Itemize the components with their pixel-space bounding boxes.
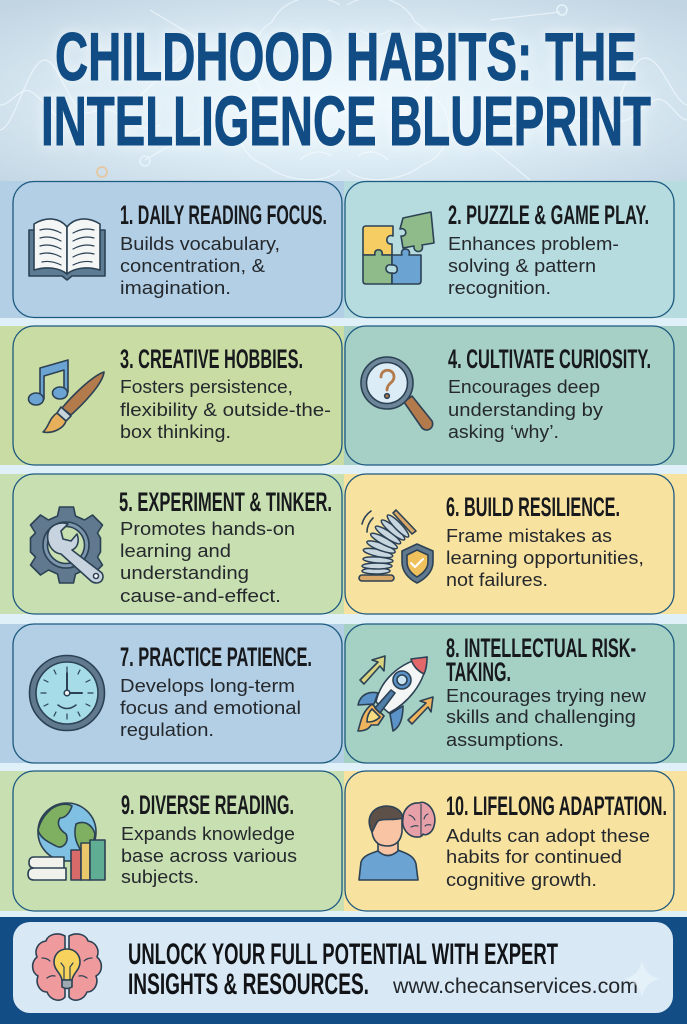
header background with brain and circuit lines (0, 0, 687, 181)
text: habit 3: Fosters persistence, (120, 377, 293, 397)
panel: 3 creative hobbies (13, 326, 342, 465)
text: habit 3: box thinking. (120, 422, 231, 442)
icon: rocket and arrows (358, 656, 433, 731)
text: habit 7: focus and emotional (120, 698, 301, 718)
footer banner (0, 917, 687, 1024)
icon: globe and books (28, 803, 105, 880)
text: habit 10: Adults can adopt these (446, 826, 650, 846)
footer call to action (128, 938, 558, 1001)
text: habit 1: imagination. (120, 278, 231, 298)
text: habit 1 (120, 200, 327, 298)
panel: 5 experiment and tinker (13, 474, 342, 614)
panel: 7 practice patience (13, 624, 342, 763)
text: habit 3: flexibility & outside-the- (120, 400, 331, 420)
text: habit 4 (448, 344, 651, 442)
text: habit 6: Frame mistakes as (446, 526, 612, 546)
text: habit 10: cognitive growth. (446, 870, 597, 890)
text: habit 5: Promotes hands-on (120, 519, 295, 539)
icon: open book (29, 219, 105, 280)
panel: 8 intellectual risk-taking (345, 624, 674, 763)
icon: person with brain (359, 802, 435, 880)
text: habit 9: subjects. (121, 867, 199, 887)
text: habit 5: understanding (120, 563, 249, 583)
text: habit 1: 1. DAILY READING FOCUS. (120, 200, 327, 230)
text: habit 4: understanding by (448, 400, 603, 420)
icon: music note and paintbrush (28, 360, 104, 432)
text: habit 8: Encourages trying new (446, 686, 647, 706)
text: habit 5 (119, 487, 332, 606)
text: habit 2 (448, 200, 649, 298)
row background bands (0, 181, 687, 917)
text: habit 6: learning opportunities, (446, 548, 644, 568)
text: habit 2: Enhances problem- (448, 234, 619, 254)
panel: 2 puzzle and game play (345, 182, 674, 318)
title (41, 19, 651, 160)
text: habit 6: not failures. (446, 570, 548, 590)
text: habit 4: Encourages deep (448, 377, 600, 397)
text: habit 5: 5. EXPERIMENT & TINKER. (119, 487, 332, 517)
text: habit 9 (121, 790, 297, 887)
icon: clock (30, 656, 104, 730)
text: habit 6 (446, 492, 644, 590)
icon: magnifying glass with question mark (361, 357, 433, 430)
panel: 9 diverse reading (13, 771, 342, 911)
icon: puzzle pieces (363, 212, 434, 284)
panel: 10 lifelong adaptation (345, 771, 674, 911)
icon: brain with light bulb (33, 934, 101, 1000)
panel: 4 cultivate curiosity (345, 326, 674, 465)
text: habit 8: skills and challenging (446, 707, 636, 727)
text: habit 7 (120, 642, 312, 740)
icon: spring and shield (359, 510, 433, 583)
panel: 1 daily reading focus (13, 182, 342, 318)
text: habit 9: Expands knowledge (121, 824, 295, 844)
text: habit 9: 9. DIVERSE READING. (121, 790, 294, 820)
text: habit 10: habits for continued (446, 847, 622, 867)
text: habit 2: solving & pattern (448, 256, 596, 276)
footer call to action: INSIGHTS & RESOURCES. (128, 968, 369, 1001)
text: habit 7: regulation. (120, 720, 214, 740)
website url: www.checanservices.com (392, 975, 638, 998)
text: habit 1: Builds vocabulary, (120, 234, 280, 254)
text: habit 9: base across various (121, 846, 297, 866)
text: habit 2: recognition. (448, 278, 551, 298)
text: habit 3: 3. CREATIVE HOBBIES. (120, 344, 303, 374)
text: habit 8: TAKING. (446, 657, 511, 687)
text: habit 7: Develops long-term (120, 676, 295, 696)
text: habit 8: assumptions. (446, 730, 564, 750)
text: habit 10 (446, 791, 667, 890)
text: habit 5: cause-and-effect. (120, 586, 281, 606)
text: habit 3 (120, 344, 331, 442)
text: habit 4: asking ‘why’. (448, 422, 559, 442)
text: habit 7: 7. PRACTICE PATIENCE. (120, 642, 312, 672)
icon: gear and wrench (30, 507, 103, 583)
sparkle (624, 961, 660, 997)
text: habit 5: learning and (120, 541, 231, 561)
panel: 6 build resilience (345, 474, 674, 614)
text: habit 1: concentration, & (120, 256, 265, 276)
text: habit 8 (446, 633, 647, 750)
